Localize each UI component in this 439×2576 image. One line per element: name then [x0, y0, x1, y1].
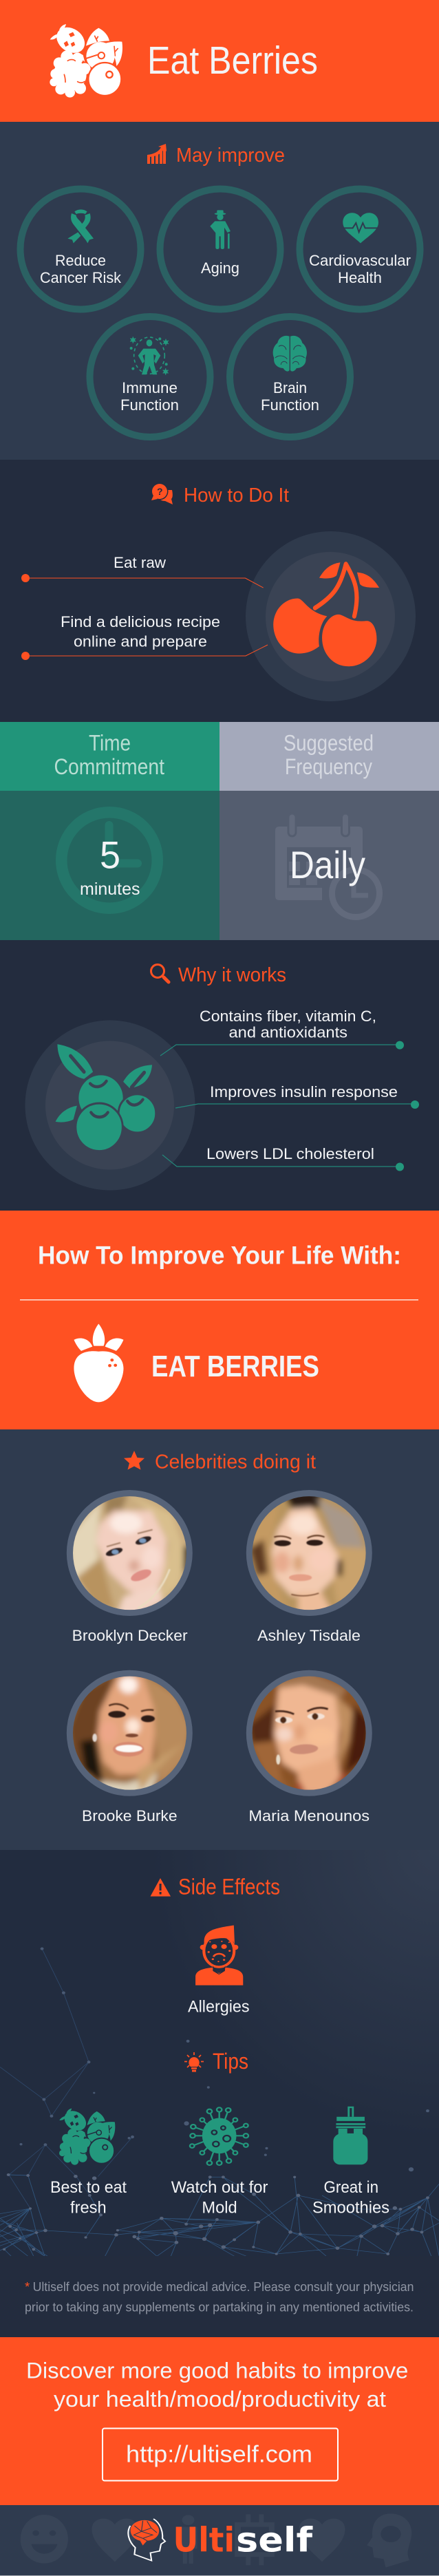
icon: rising chart [147, 144, 167, 164]
celebrity names: Ashley Tisdale [257, 1627, 361, 1644]
panel: disclaimer: prior to taking any supplements or partaking in any mentioned activities. [25, 2300, 414, 2314]
step: find a recipe: online and prepare [74, 633, 207, 650]
time commitment heading: Commitment [54, 754, 164, 779]
suggested frequency heading [283, 731, 374, 779]
icon: warning triangle [150, 1878, 171, 1897]
panel: header [0, 0, 439, 122]
icon: star [124, 1451, 144, 1470]
time value: 5 [100, 833, 120, 877]
reason: insulin response [175, 1083, 419, 1109]
portrait: maria menounos [252, 1676, 366, 1790]
call to action text [26, 2359, 408, 2412]
benefit: brain function [261, 336, 319, 414]
benefit: reduce cancer risk: Reduce [55, 252, 106, 269]
time value [80, 833, 140, 899]
step: eat raw [21, 554, 264, 588]
tip: watch out for mold: Mold [202, 2198, 237, 2217]
reason: fiber and antioxidants: and antioxidants [228, 1024, 347, 1041]
tip: watch out for mold: Watch out for [171, 2178, 268, 2197]
heading: side effects: Side Effects [178, 1875, 280, 1899]
panel: time commitment [0, 722, 220, 940]
benefit: cardiovascular health [309, 213, 411, 286]
frequency value: Daily [290, 843, 365, 886]
tip: great in smoothies [312, 2107, 389, 2217]
panel: may improve [0, 122, 439, 460]
suggested frequency heading: Frequency [285, 754, 372, 779]
benefit: immune function [120, 337, 179, 414]
panel: disclaimer: * [25, 2279, 30, 2294]
url button: http://ultiself.com [126, 2442, 312, 2468]
icon: chat bubbles: ? [157, 486, 163, 497]
tip: best to eat fresh [50, 2107, 127, 2217]
call to action text: Discover more good habits to improve [26, 2359, 408, 2383]
icon: blueberries [56, 1044, 156, 1151]
reason: insulin response: Improves insulin response [210, 1083, 398, 1100]
celebrity names: Brooke Burke [82, 1807, 178, 1824]
panel: disclaimer: Ultiself does not provide medical advice. Please consult your physician [33, 2279, 414, 2294]
heading: tips: Tips [213, 2049, 248, 2074]
benefit: aging [201, 210, 239, 277]
heading: tips [184, 2049, 248, 2074]
heading: may improve: May improve [176, 145, 285, 167]
logo [128, 2519, 313, 2561]
logo: self [236, 2520, 313, 2560]
photo rings [67, 1490, 372, 1796]
call to action text: your health/mood/productivity at [54, 2387, 386, 2412]
benefit: cardiovascular health: Cardiovascular [309, 252, 411, 269]
step: eat raw: Eat raw [114, 554, 166, 571]
icon: berries [50, 22, 122, 98]
panel: celebrities [0, 1429, 439, 1850]
panel: footer [0, 2505, 439, 2576]
benefit: cardiovascular health: Health [338, 269, 382, 286]
portrait: ashley tisdale [252, 1496, 366, 1610]
celebrity names: Brooklyn Decker [72, 1627, 188, 1644]
icon: magnifier [151, 965, 169, 982]
panel: disclaimer [0, 2256, 439, 2337]
icon: clock [61, 812, 158, 908]
suggested frequency heading: Suggested [283, 731, 374, 756]
heading: how to do it [151, 483, 289, 507]
tip: great in smoothies: Smoothies [312, 2198, 389, 2217]
icon: brain [273, 336, 307, 372]
icon: mold spore [190, 2107, 248, 2165]
icon: heart with pulse [343, 213, 378, 243]
benefit: brain function: Function [261, 396, 319, 414]
url button [103, 2428, 338, 2480]
banner habit name: EAT BERRIES [151, 1350, 319, 1383]
icon: brain head [128, 2519, 165, 2561]
icon: light bulb [184, 2052, 204, 2072]
side effect: allergies: Allergies [188, 1997, 250, 2016]
cherry circles [246, 531, 416, 701]
benefit: reduce cancer risk [40, 209, 122, 286]
benefit: immune function: Immune [122, 379, 178, 396]
panel: call to action [0, 2337, 439, 2505]
panel: suggested frequency [220, 722, 439, 940]
time commitment heading: Time [89, 731, 131, 756]
tip: best to eat fresh: Best to eat [50, 2178, 127, 2197]
tip: great in smoothies: Great in [323, 2178, 378, 2197]
icon: chat bubbles [151, 483, 173, 504]
benefit: reduce cancer risk: Cancer Risk [40, 269, 122, 286]
heading: how to do it: How to Do It [184, 485, 289, 507]
time commitment heading [54, 731, 164, 779]
icon: ribbon [67, 209, 94, 243]
tip: watch out for mold [171, 2107, 268, 2217]
heading: celebrities: Celebrities doing it [155, 1451, 316, 1473]
reason: fiber and antioxidants: Contains fiber, vitamin C, [200, 1008, 376, 1025]
icon: strawberry [74, 1324, 123, 1402]
icon: cherries [273, 562, 379, 667]
benefit: aging: Aging [201, 259, 239, 277]
benefit: immune function: Function [120, 396, 179, 414]
berry circles [25, 1020, 195, 1191]
icon: berries [59, 2107, 115, 2165]
banner heading: How To Improve Your Life With: [38, 1242, 401, 1269]
logo: Ulti [173, 2520, 235, 2560]
celebrity names: Maria Menounos [248, 1807, 370, 1824]
network background [0, 1947, 439, 2256]
icon: old man with cane [210, 210, 231, 249]
time value: minutes [80, 880, 140, 899]
panel: how to do it [0, 460, 439, 722]
portrait: brooke burke [73, 1676, 186, 1790]
portrait: brooklyn decker [73, 1496, 186, 1610]
panel: how to improve banner [0, 1211, 439, 1429]
title: Eat Berries [147, 39, 318, 83]
icon: smoothie jar [333, 2107, 367, 2164]
side effect: allergies [188, 1925, 250, 2016]
tip: best to eat fresh: fresh [70, 2198, 107, 2217]
panel: why it works [0, 940, 439, 1211]
icon: calendar with clock [275, 813, 380, 917]
benefit: brain function: Brain [273, 379, 307, 396]
reason: fiber and antioxidants [160, 1008, 404, 1056]
step: find a recipe: Find a delicious recipe [61, 613, 220, 630]
benefit rings [21, 189, 420, 437]
celebrity names [72, 1627, 370, 1824]
reason: ldl cholesterol [162, 1145, 404, 1171]
heading: why it works: Why it works [178, 964, 286, 986]
reason: ldl cholesterol: Lowers LDL cholesterol [206, 1145, 374, 1162]
icon: man with rash [195, 1925, 243, 1986]
faint footer icons [21, 2513, 411, 2568]
icon: immune figure [130, 337, 169, 375]
panel: side effects and tips [0, 1850, 439, 2256]
step: find a recipe [21, 613, 268, 660]
